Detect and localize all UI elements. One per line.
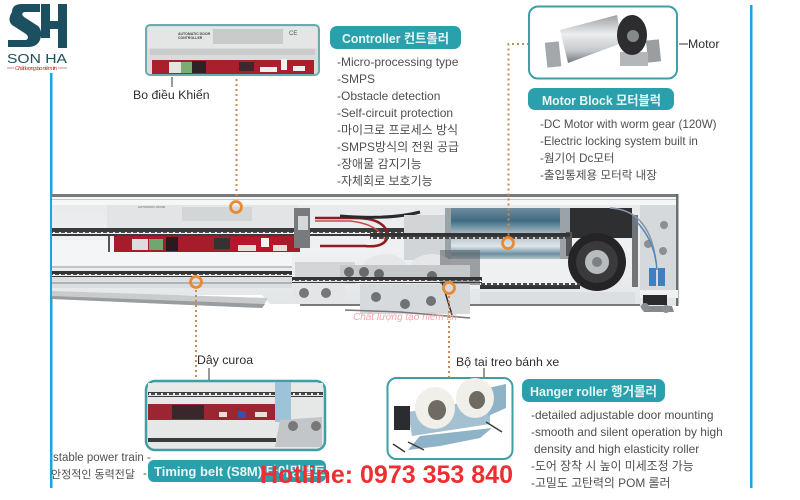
marker: motor	[502, 238, 514, 248]
heading: Timing belt: Timing belt (S8M) 타이밍벨트	[154, 464, 326, 479]
lower extrusion	[52, 276, 292, 288]
text block: motor features	[540, 118, 717, 182]
right end bracket and wires	[632, 215, 638, 287]
text block: motor features: -Electric locking system built in	[540, 135, 698, 148]
callout: Bộ tai treo bánh xe	[456, 355, 559, 378]
text block: controller features	[337, 55, 459, 188]
rail body	[52, 195, 678, 306]
leader: controller	[236, 79, 238, 198]
heading: Motor Block	[528, 88, 674, 110]
text block: timing belt features: stable power train -	[53, 452, 151, 464]
panel: controller image: AUTOMATIC DOOR	[178, 32, 211, 36]
text block: controller features: -마이크로 프로세스 방식	[337, 123, 458, 137]
mid belt over motor	[370, 233, 570, 236]
panel: timing belt image	[146, 381, 325, 450]
callout: Dây curoa	[197, 353, 253, 381]
heading: Controller: Controller 컨트롤러	[342, 31, 449, 46]
panel: controller image	[146, 25, 319, 75]
watermark: Chất lượng tạo niềm tin	[353, 311, 458, 323]
text block: timing belt features	[51, 452, 151, 481]
logo: Son Ha: SON HA	[7, 52, 68, 66]
text block: controller features: -장애물 감지기능	[337, 157, 422, 171]
callout: Bộ tai treo bánh xe: Bộ tai treo bánh xe	[456, 355, 559, 369]
panel: motor image	[529, 6, 677, 78]
leader: hanger roller	[448, 296, 450, 378]
drive wheel	[568, 233, 626, 291]
text block: hanger roller features: -smooth and silent operation by high	[531, 425, 723, 439]
callout: Bo điều Khiển: Bo điều Khiển	[133, 88, 210, 102]
text block: hanger roller features	[531, 408, 723, 490]
lower belt	[52, 271, 292, 274]
right blue border line	[750, 5, 752, 488]
heading: Hanger roller: Hanger roller 행거롤러	[530, 384, 657, 399]
logo: Son Ha: Chất lượng tạo niềm tin	[15, 65, 57, 72]
text block: controller features: -SMPS	[337, 72, 375, 86]
red control board on rail	[108, 236, 110, 252]
main door operator rail	[52, 194, 678, 323]
worm gear block	[570, 208, 632, 238]
marker: hanger roller	[444, 282, 454, 294]
text block: controller features: -Self-circuit protection	[337, 106, 453, 120]
text block: hanger roller features: density and high elasticity roller	[534, 442, 699, 456]
hotline: Hotline: 0973 353 840	[260, 461, 513, 489]
heading: Controller	[330, 26, 461, 49]
text block: hanger roller features: -detailed adjustable door mounting	[531, 408, 713, 422]
panel: controller image: CONTROLLER	[178, 36, 203, 40]
text block: controller features: -Obstacle detection	[337, 89, 440, 103]
text block: timing belt features: -	[143, 468, 147, 480]
text block: motor features: -DC Motor with worm gear (120W)	[540, 118, 717, 131]
heading: Motor Block: Motor Block 모터블럭	[542, 93, 661, 108]
callout: Bo điều Khiển	[133, 77, 210, 102]
text block: hanger roller features: -고밀도 고탄력의 POM 롤러	[531, 476, 670, 490]
logo: Son Ha	[7, 4, 68, 72]
text block: timing belt features: 안정적인 동력전달	[51, 468, 135, 481]
text block: hanger roller features: -도어 장착 시 높이 미세조정 가능	[531, 459, 694, 473]
text block: controller features: -SMPS방식의 전원 공급	[337, 140, 459, 154]
motor cylinder	[447, 208, 567, 259]
upper belt	[52, 228, 570, 232]
panel: controller image: CE	[289, 31, 297, 37]
callout: Dây curoa: Dây curoa	[197, 353, 253, 367]
text block: motor features: -출입통제용 모터락 내장	[540, 169, 657, 182]
red wires	[315, 218, 388, 246]
leader: timing belt	[195, 290, 197, 380]
left blue border line	[50, 73, 52, 488]
marker: controller	[230, 202, 242, 212]
leader: motor	[508, 44, 529, 236]
marker: timing belt	[190, 276, 202, 288]
panel: hanger roller image	[388, 378, 512, 459]
callout: Motor: Motor	[688, 37, 719, 51]
main door operator rail: AUTOMATIC DOOR	[138, 205, 166, 209]
text block: controller features: -Micro-processing type	[337, 55, 459, 69]
heading: Hanger roller	[522, 379, 665, 402]
heading: Timing belt	[148, 460, 326, 482]
text block: controller features: -자체회로 보호기능	[337, 174, 433, 188]
controller housing on rail	[107, 205, 297, 229]
carriage with rollers	[363, 254, 407, 282]
text block: motor features: -웜기어 Dc모터	[540, 152, 615, 165]
